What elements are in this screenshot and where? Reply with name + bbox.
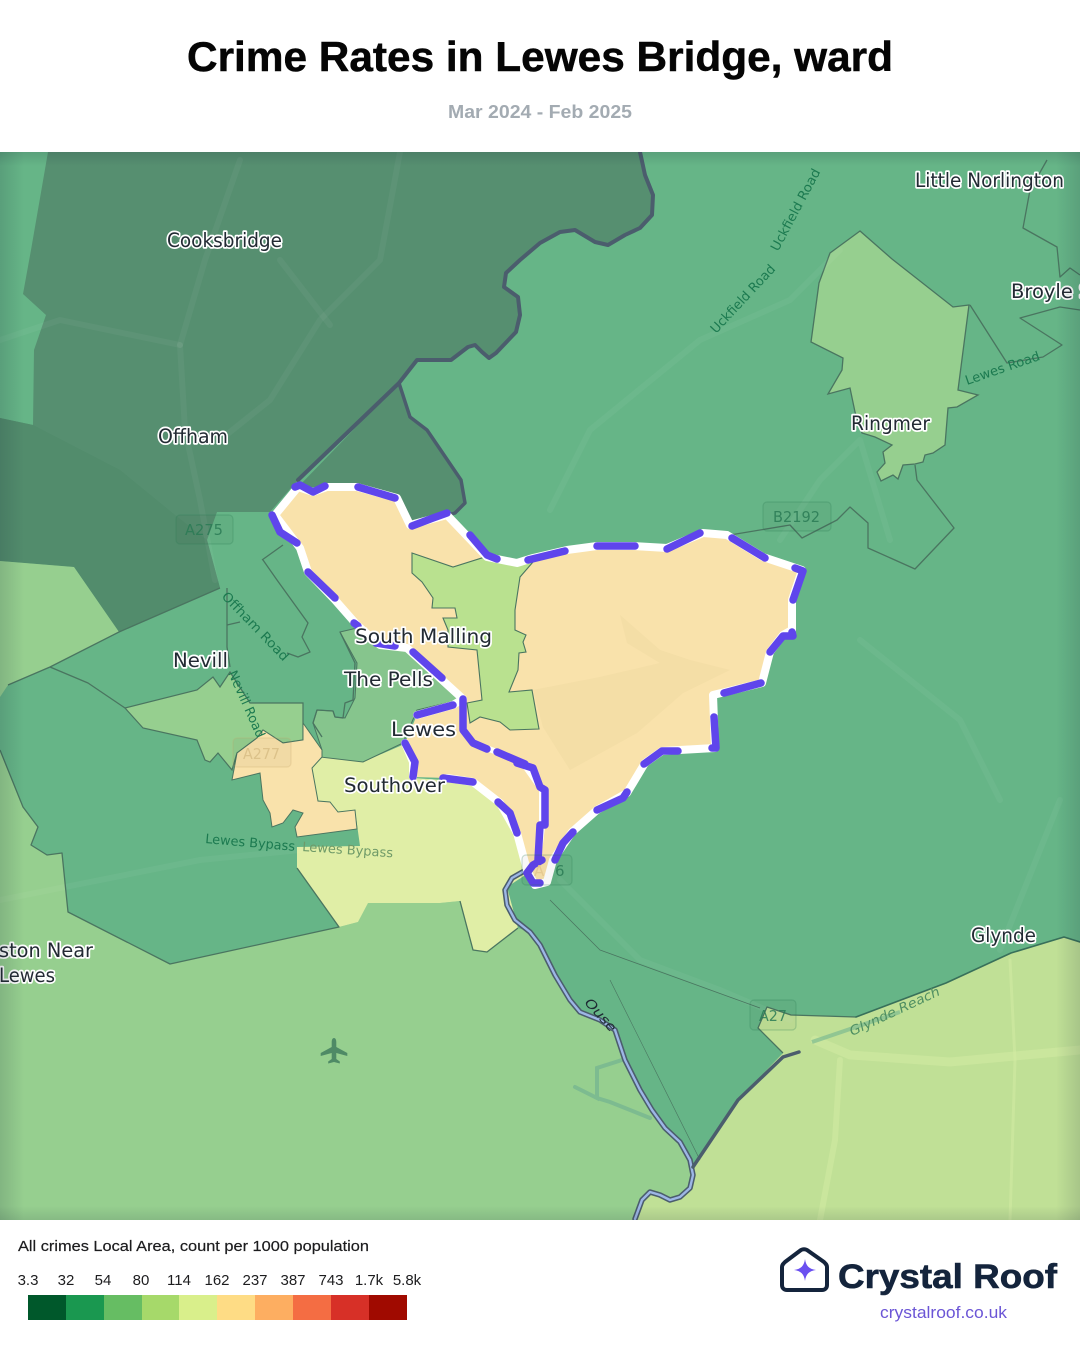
icon: airport plane bbox=[321, 1038, 347, 1064]
road shield: A26: 6 bbox=[555, 862, 565, 880]
road shield: A26 bbox=[522, 855, 572, 885]
road labels: Glynde Reach bbox=[847, 985, 943, 1040]
icon: house with star bbox=[782, 1249, 827, 1290]
place labels bbox=[0, 169, 1080, 987]
region: The Pells bbox=[313, 628, 463, 762]
place labels: Ringmer bbox=[851, 412, 931, 435]
title: Crime Rates in Lewes Bridge, ward bbox=[187, 33, 893, 80]
legend scale labels: 32 bbox=[58, 1272, 74, 1289]
Glynde Reach stream bbox=[812, 1012, 900, 1042]
legend scale labels: 237 bbox=[242, 1272, 268, 1289]
road shield: A277 bbox=[233, 738, 291, 767]
place labels: Southover bbox=[344, 774, 446, 797]
legend scale labels: 80 bbox=[133, 1272, 149, 1289]
faint roads in the north-west bbox=[177, 312, 328, 348]
faint roads in the south bbox=[815, 960, 1080, 1220]
place labels: Lewes bbox=[391, 718, 456, 741]
region: South Malling green bbox=[412, 553, 539, 730]
logo: Crystal Roof bbox=[782, 1249, 1058, 1322]
road labels bbox=[205, 166, 1042, 1040]
legend scale labels: 5.8k bbox=[393, 1272, 422, 1289]
place labels: ston Near bbox=[0, 939, 94, 962]
place labels: Cooksbridge bbox=[167, 229, 282, 252]
place labels: Nevill bbox=[173, 649, 228, 672]
place labels: Little Norlington bbox=[915, 169, 1064, 192]
road labels: Uckfield Road bbox=[708, 262, 779, 337]
website: crystalroof.co.uk bbox=[880, 1304, 1008, 1322]
legend scale labels: 3.3 bbox=[18, 1272, 38, 1289]
road labels: Uckfield Road bbox=[768, 166, 824, 254]
road labels: Ouse bbox=[581, 996, 619, 1035]
road shield: B2192 bbox=[763, 502, 831, 531]
region: orange A277 area bbox=[232, 723, 357, 837]
road labels: Lewes Bypass bbox=[205, 832, 296, 855]
road labels: Lewes Road bbox=[963, 349, 1042, 389]
place labels: Glynde bbox=[971, 924, 1036, 947]
region: ward Lewes Bridge fill bbox=[275, 487, 802, 885]
ward boundary: white underlay bbox=[275, 487, 802, 885]
place labels: Lewes bbox=[0, 964, 55, 987]
region: light green west edge bbox=[0, 561, 119, 697]
legend scale labels: 1.7k bbox=[355, 1272, 384, 1289]
region: Ringmer bbox=[811, 231, 978, 481]
region: lobe east of Offham bbox=[298, 383, 465, 525]
road shield: A275: A275 bbox=[185, 521, 223, 539]
road shield: A26: A bbox=[534, 862, 545, 880]
legend bbox=[18, 1238, 422, 1320]
stream west of the river bbox=[575, 1060, 650, 1118]
legend scale labels: 114 bbox=[167, 1272, 191, 1289]
road shield: B2192: B2192 bbox=[773, 508, 820, 526]
region: light green south-west bbox=[0, 750, 693, 1220]
region: dark green north-west bbox=[12, 152, 651, 588]
road labels: Offham Road bbox=[218, 589, 291, 665]
shaded relief inside ward bbox=[533, 615, 730, 770]
wordmark: Crystal Roof bbox=[838, 1258, 1058, 1296]
legend scale labels: 162 bbox=[204, 1272, 230, 1289]
road labels: Lewes Bypass bbox=[302, 840, 394, 861]
faint roads in the east bbox=[0, 250, 1060, 1020]
place labels: The Pells bbox=[343, 668, 433, 691]
road shield: A27 bbox=[750, 1000, 796, 1030]
map panel bbox=[0, 152, 1080, 1220]
region: darker south-west of Offham bbox=[0, 418, 220, 588]
legend title: All crimes Local Area, count per 1000 population bbox=[18, 1238, 369, 1255]
legend scale labels: 743 bbox=[318, 1272, 344, 1289]
region: pale yellow Southover bbox=[297, 743, 533, 952]
boundaries: thin ward outlines bbox=[0, 160, 1080, 1160]
road shield: A275 bbox=[176, 515, 233, 544]
subtitle: date range: Mar 2024 - Feb 2025 bbox=[448, 101, 632, 122]
legend scale labels bbox=[18, 1272, 422, 1289]
river and boundary lines bbox=[298, 152, 1080, 1219]
ward boundary: purple dashes bbox=[272, 485, 803, 883]
region: pale green south-east bbox=[635, 937, 1080, 1220]
place labels: South Malling bbox=[355, 625, 492, 648]
legend colour ramp bbox=[28, 1295, 407, 1320]
place labels: Offham bbox=[158, 425, 228, 448]
road labels: Nevill Road bbox=[224, 669, 267, 740]
road shield: A27: A27 bbox=[759, 1007, 787, 1025]
map edge vignette bbox=[0, 152, 1080, 1220]
legend scale labels: 387 bbox=[280, 1272, 306, 1289]
region: Nevill light green bbox=[125, 672, 303, 770]
legend scale labels: 54 bbox=[95, 1272, 111, 1289]
road shield: A277: A277 bbox=[243, 745, 280, 763]
